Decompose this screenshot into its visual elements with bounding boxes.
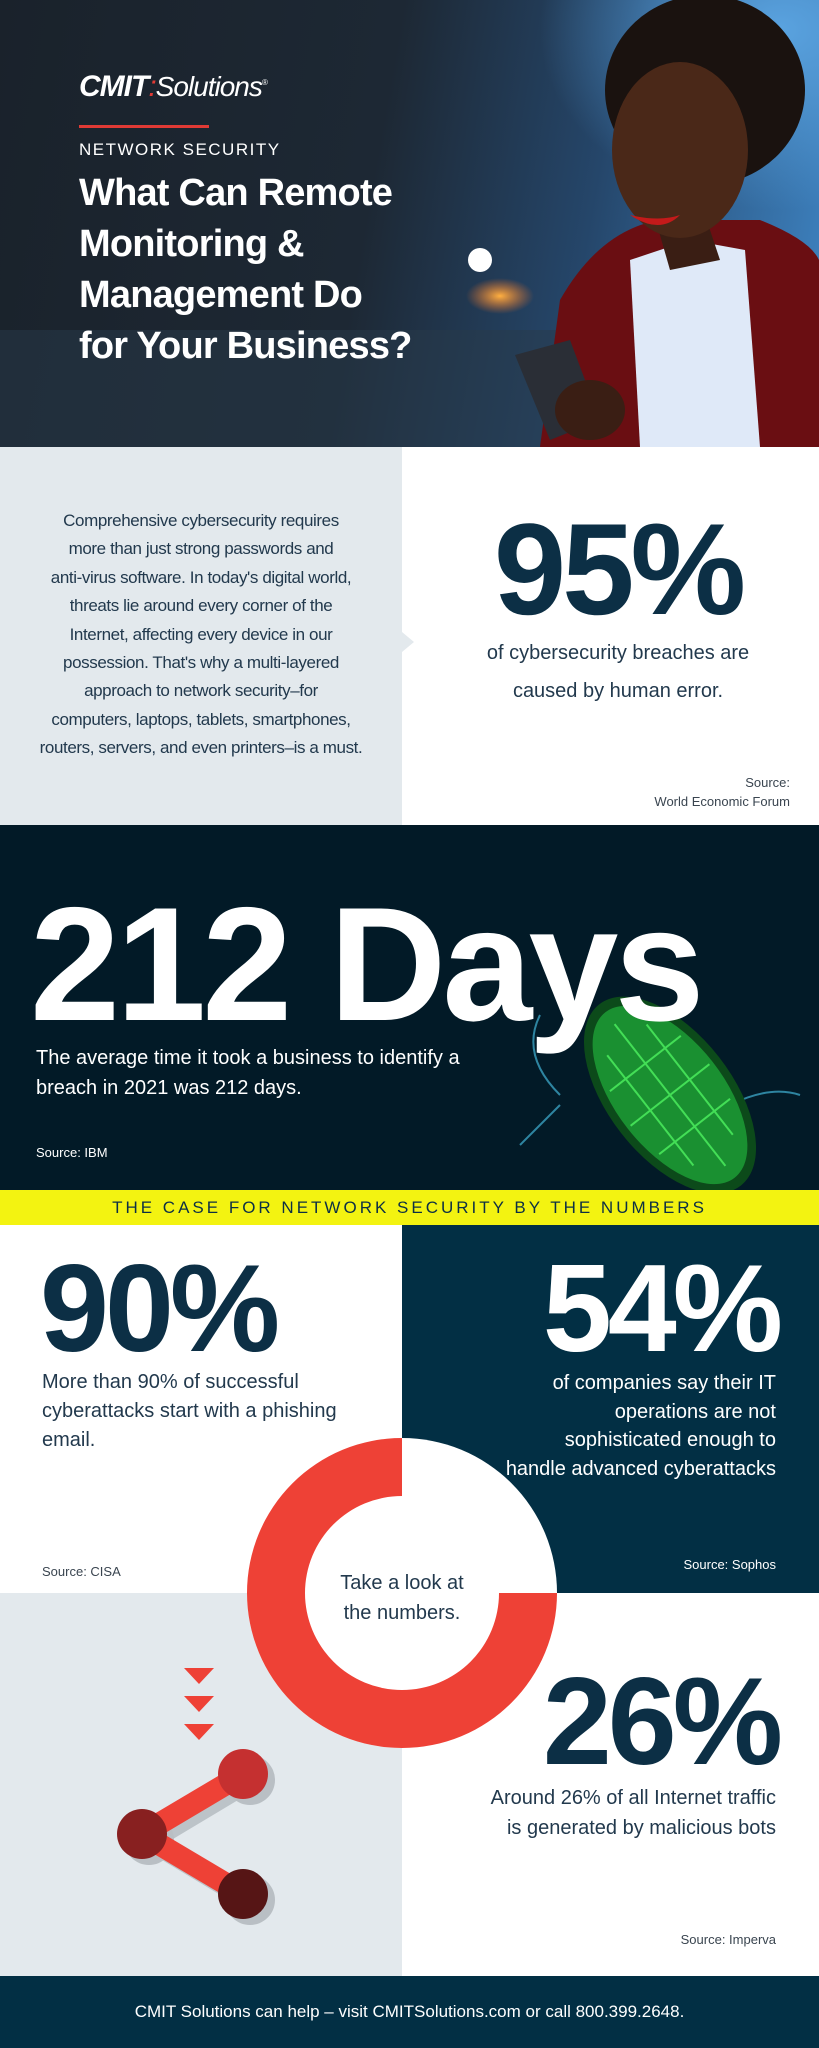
big number 95%: 95% (494, 496, 742, 642)
footer (0, 1976, 819, 2048)
source: Source: (745, 775, 790, 790)
caption (36, 1047, 460, 1099)
intro paragraph (40, 511, 362, 757)
intro paragraph: Comprehensive cybersecurity requires (63, 511, 339, 530)
big number 212 Days: 212 Days (30, 874, 701, 1055)
caption: breach in 2021 was 212 days. (36, 1077, 302, 1099)
red rule (79, 125, 209, 128)
caption: More than 90% of successful (42, 1371, 299, 1393)
photo illustration: woman with phone (0, 0, 819, 447)
shirt (630, 240, 760, 447)
icon: share network (117, 1749, 275, 1925)
caption: of cybersecurity breaches are (487, 642, 749, 664)
caption (506, 1372, 776, 1480)
donut label: the numbers. (344, 1602, 460, 1624)
caption: email. (42, 1429, 95, 1451)
title: What Can Remote (79, 172, 392, 214)
intro paragraph: threats lie around every corner of the (70, 596, 332, 615)
panel: intro text (0, 447, 402, 825)
arrow: notch (402, 632, 414, 652)
source: Source: Sophos (683, 1557, 776, 1572)
phone & hand (515, 340, 600, 440)
caption: operations are not (615, 1401, 776, 1423)
caption: The average time it took a business to identify a (36, 1047, 460, 1069)
caption: sophisticated enough to (565, 1429, 776, 1451)
source (654, 775, 790, 809)
intro paragraph: routers, servers, and even printers–is a must. (40, 738, 362, 757)
panel: 54% stat (402, 1225, 819, 1593)
intro paragraph: more than just strong passwords and (69, 539, 333, 558)
intro paragraph: approach to network security–for (84, 681, 318, 700)
title: for Your Business? (79, 325, 412, 367)
icon: three down triangles (184, 1668, 214, 1740)
title (79, 172, 412, 367)
title: Management Do (79, 274, 362, 316)
panel: 90% stat (0, 1225, 402, 1593)
logo: CMIT:Solutions® (79, 70, 267, 103)
title: Monitoring & (79, 223, 304, 265)
panel: 212 days (0, 825, 819, 1190)
caption: of companies say their IT (553, 1372, 776, 1394)
intro paragraph: computers, laptops, tablets, smartphones, (51, 710, 351, 729)
caption: handle advanced cyberattacks (506, 1458, 776, 1480)
kicker: NETWORK SECURITY (79, 140, 281, 159)
source: Source: CISA (42, 1564, 121, 1579)
caption (490, 1787, 776, 1839)
donut label: Take a look at (340, 1572, 464, 1594)
caption (42, 1371, 337, 1451)
source: Source: IBM (36, 1145, 108, 1160)
banner: section heading: THE CASE FOR NETWORK SECURITY BY THE NUMBERS (112, 1198, 707, 1217)
intro paragraph: possession. That's why a multi-layered (63, 653, 339, 672)
caption: cyberattacks start with a phishing (42, 1400, 337, 1422)
panel: 95% stat (487, 496, 790, 809)
big number 26%: 26% (543, 1653, 779, 1791)
hair (605, 0, 805, 185)
header: hero photo section (0, 0, 819, 447)
intro paragraph: anti-virus software. In today's digital world, (51, 568, 351, 587)
icon: green circuit bug (519, 996, 800, 1190)
donut label (340, 1572, 464, 1624)
arrow: navy notch (603, 1593, 621, 1608)
big number 54%: 54% (543, 1240, 779, 1378)
footer: CMIT Solutions can help – visit CMITSolutions.com or call 800.399.2648. (135, 2002, 684, 2021)
big number 90%: 90% (40, 1240, 276, 1378)
intro paragraph: Internet, affecting every device in our (70, 625, 332, 644)
caption: is generated by malicious bots (507, 1817, 776, 1839)
face (612, 62, 748, 238)
chart: donut (247, 1438, 557, 1748)
jacket (540, 220, 819, 447)
panel: bottom left gray (0, 1593, 402, 1976)
banner: section heading (0, 1190, 819, 1225)
panel: 26% stat (402, 1593, 819, 1976)
caption: caused by human error. (513, 680, 723, 702)
caption: Around 26% of all Internet traffic (491, 1787, 776, 1809)
source: World Economic Forum (654, 794, 790, 809)
neck (650, 200, 720, 270)
source: Source: Imperva (681, 1932, 776, 1947)
caption (487, 642, 749, 702)
